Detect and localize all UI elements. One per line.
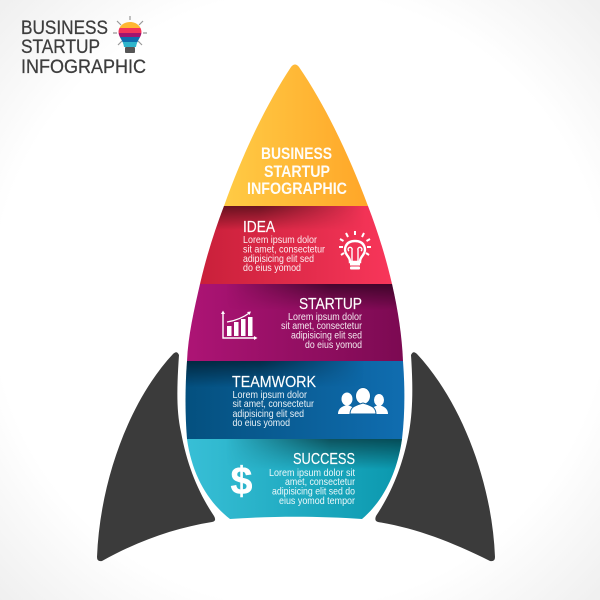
segment: success: SUCCESS <box>293 451 355 468</box>
icon: dollar sign: $ <box>231 460 253 503</box>
icon: bar chart <box>221 310 258 340</box>
segment: teamwork <box>180 361 410 439</box>
segment: business startup (nose): STARTUP <box>264 163 330 181</box>
segment: success <box>180 439 410 519</box>
segment: teamwork: sit amet, consectetur <box>232 399 314 410</box>
segment: teamwork: Lorem ipsum dolor <box>232 390 307 401</box>
right fin <box>375 352 495 561</box>
segment: startup: Lorem ipsum dolor <box>288 312 362 323</box>
segment: idea: sit amet, consectetur <box>243 244 325 256</box>
segment: startup: sit amet, consectetur <box>281 321 362 332</box>
segment: success: amet, consectetur <box>285 477 355 488</box>
segment: business startup (nose) <box>224 64 368 206</box>
left fin <box>97 352 215 561</box>
icon: colourful light bulb <box>113 16 147 53</box>
segment: startup: STARTUP <box>299 296 362 313</box>
segment: teamwork: TEAMWORK <box>232 374 317 391</box>
icon: light bulb <box>339 231 371 270</box>
segment: idea: Lorem ipsum dolor <box>243 235 317 246</box>
segment: success: eius yomod tempor <box>279 496 355 507</box>
title: STARTUP <box>21 37 100 58</box>
title <box>21 18 146 78</box>
rocket body <box>180 64 410 519</box>
segment: startup: do eius yomod <box>305 340 362 351</box>
title: INFOGRAPHIC <box>21 57 146 78</box>
segment: idea: adipisicing elit sed <box>243 254 314 265</box>
segment: idea <box>200 206 392 284</box>
segment: startup <box>180 284 410 361</box>
segment: teamwork: adipisicing elit sed <box>232 409 304 420</box>
segment: business startup (nose): BUSINESS <box>261 145 332 163</box>
segment: success: Lorem ipsum dolor sit <box>269 468 355 479</box>
segment: idea: do eius yomod <box>243 263 301 274</box>
segment: business startup (nose): INFOGRAPHIC <box>247 180 347 198</box>
segment: teamwork: do eius yomod <box>232 418 290 429</box>
segment: idea: IDEA <box>243 219 276 236</box>
title: BUSINESS <box>21 18 108 39</box>
segment: success: adipisicing elit sed do <box>272 486 355 498</box>
segment: startup: adipisicing elit sed <box>291 330 362 342</box>
icon: three people <box>338 388 388 414</box>
